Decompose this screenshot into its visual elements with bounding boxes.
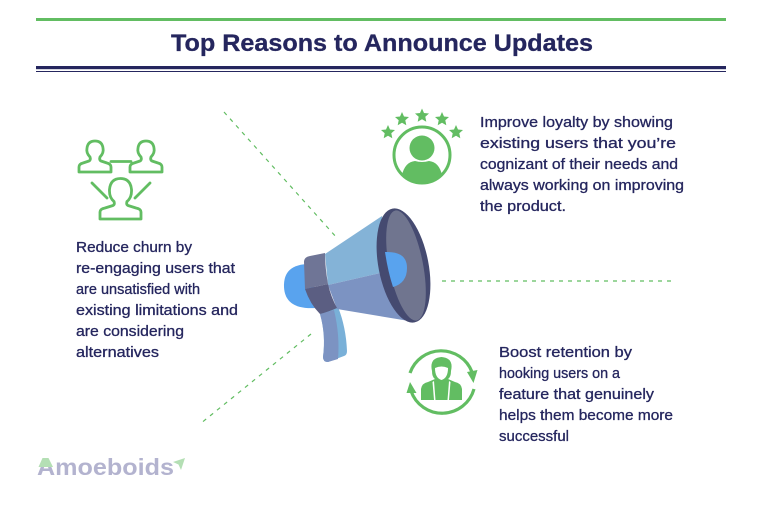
text: improve loyalty: the product. [480, 199, 566, 215]
text: reduce churn: existing limitations and [76, 303, 238, 319]
text: improve loyalty: Improve loyalty by showing [480, 115, 673, 131]
icon: megaphone [284, 204, 439, 362]
text: improve loyalty: always working on improving [480, 178, 684, 194]
text: reduce churn: are unsatisfied with [76, 282, 200, 298]
megaphone inner speaker [385, 252, 407, 287]
text: boost retention [499, 345, 673, 445]
megaphone rim [368, 204, 439, 327]
text: improve loyalty: cognizant of their needs and [480, 157, 678, 173]
text: reduce churn: are considering [76, 324, 184, 340]
logo: Amoeboids: Amoeboids [37, 454, 174, 480]
text: reduce churn: alternatives [76, 345, 159, 361]
text: reduce churn [76, 240, 238, 361]
icon: retention user in cycle [406, 351, 478, 413]
header bottom rule [36, 66, 726, 72]
megaphone back cap [284, 264, 316, 308]
text: boost retention: Boost retention by [499, 345, 633, 361]
megaphone handle [320, 307, 347, 362]
text: boost retention: helps them become more [499, 408, 673, 424]
title: Top Reasons to Announce Updates [171, 30, 593, 57]
text: reduce churn: re-engaging users that [76, 261, 235, 277]
header top rule [36, 18, 726, 21]
text: improve loyalty: existing users that you’re [480, 136, 676, 152]
megaphone collar [304, 253, 337, 314]
megaphone horn [325, 216, 415, 322]
text: reduce churn: Reduce churn by [76, 240, 193, 256]
text: boost retention: hooking users on a [499, 366, 621, 382]
text: improve loyalty [480, 115, 684, 215]
icon: connected users [79, 141, 162, 219]
text: boost retention: feature that genuinely [499, 387, 655, 403]
icon: user with stars [381, 108, 463, 183]
text: boost retention: successful [499, 429, 569, 445]
